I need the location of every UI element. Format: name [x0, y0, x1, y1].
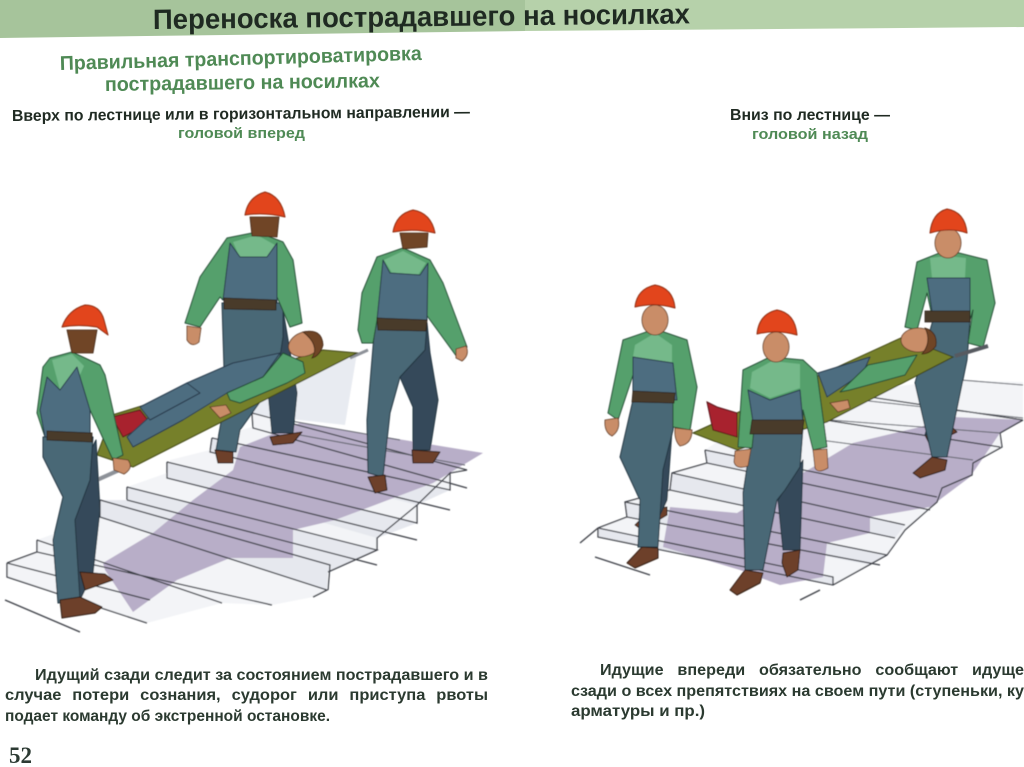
- subtitle: [60, 43, 423, 96]
- worker 2 back view: [185, 192, 302, 463]
- left direction caption: [12, 104, 470, 142]
- subtitle: Правильная транспортироватировка: [60, 43, 423, 75]
- worker 3 back view: [358, 210, 467, 493]
- right direction caption: головой назад: [752, 126, 869, 143]
- illustration: carrying stretcher upstairs: [5, 192, 483, 632]
- header band: [0, 0, 1024, 38]
- worker 1 back view: [37, 305, 130, 618]
- right caption paragraph: Идущие впереди обязательно сообщают идуще: [600, 662, 1024, 679]
- left direction caption: Вверх по лестнице или в горизонтальном направлении —: [12, 104, 470, 125]
- illustration: carrying stretcher downstairs: [580, 209, 1023, 600]
- stretcher with casualty right: [693, 328, 988, 450]
- left caption paragraph: случае потери сознания, судорог или приступа рвоты: [5, 687, 488, 704]
- casualty: [112, 327, 325, 447]
- staircase left: [5, 350, 483, 632]
- casualty right: [707, 328, 936, 437]
- left caption paragraph: Идущий сзади следит за состоянием пострадавшего и в: [35, 667, 488, 684]
- right caption paragraph: арматуры и пр.): [571, 703, 705, 720]
- stretcher with casualty: [97, 327, 368, 480]
- right caption paragraph: сзади о всех препятствиях на своем пути (ступеньки, ку: [571, 683, 1024, 700]
- right caption paragraph: [571, 662, 1024, 720]
- worker middle front view: [730, 310, 828, 595]
- right direction caption: [730, 107, 890, 143]
- left caption paragraph: подает команду об экстренной остановке.: [5, 708, 330, 725]
- worker left front view: [605, 285, 697, 568]
- worker rear front view: [905, 209, 995, 478]
- subtitle: пострадавшего на носилках: [105, 70, 380, 96]
- left caption paragraph: [5, 667, 488, 725]
- staircase right: [580, 380, 1023, 600]
- left direction caption: головой вперед: [178, 125, 306, 142]
- right direction caption: Вниз по лестнице —: [730, 107, 890, 124]
